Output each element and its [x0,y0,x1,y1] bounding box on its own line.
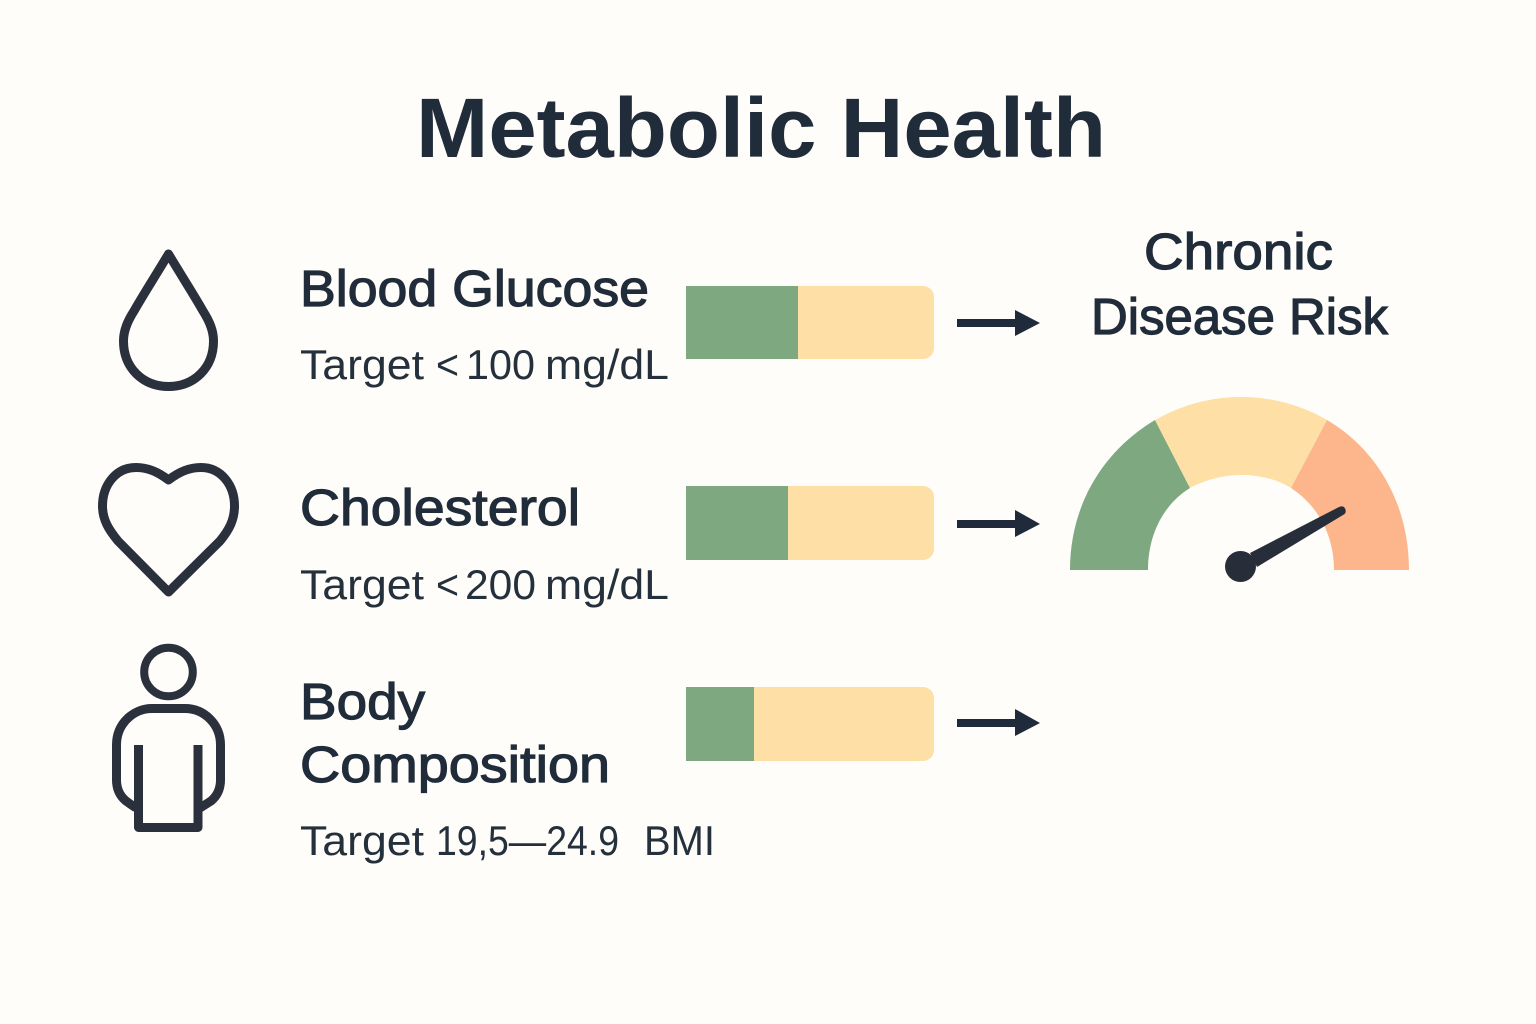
arrow: body composition [957,709,1040,736]
gauge [1070,397,1409,582]
heading: body composition: Composition [300,736,610,793]
gauge segment: yellow [1155,397,1327,488]
bar: cholesterol [686,486,934,560]
target: blood glucose: < [436,341,459,388]
gauge segment: orange [1291,420,1409,570]
target: blood glucose [300,341,669,388]
heading: blood glucose: Blood Glucose [300,260,649,317]
target: cholesterol: < [436,561,459,608]
target: blood glucose: 100 [466,341,535,388]
bar: blood glucose [686,286,934,359]
icon: blood drop [124,254,214,386]
bar: body composition [686,687,934,761]
target: blood glucose: Target [300,341,424,388]
icon: heart [102,468,234,592]
heading: chronic disease risk: Disease Risk [1091,288,1388,345]
target: cholesterol: 200 [465,561,536,608]
gauge segment: green [1070,420,1190,570]
gauge needle [1225,506,1346,582]
target: blood glucose: mg/dL [545,341,669,388]
target: body composition: BMI [644,817,715,864]
target: body composition: 19,5—24.9 [436,817,619,864]
arrow: blood glucose [957,310,1040,336]
heading: body composition: Body [300,673,426,730]
heading: chronic disease risk [1091,223,1388,345]
icon: person [116,648,220,828]
heading: chronic disease risk: Chronic [1144,223,1333,280]
heading: cholesterol: Cholesterol [300,479,580,536]
target: cholesterol [300,561,669,608]
heading: body composition [300,673,610,793]
target: cholesterol: Target [300,561,424,608]
arrow: cholesterol [957,510,1040,537]
target: body composition [300,817,715,864]
title: Metabolic Health [416,81,1106,175]
target: body composition: Target [300,817,424,864]
target: cholesterol: mg/dL [545,561,669,608]
